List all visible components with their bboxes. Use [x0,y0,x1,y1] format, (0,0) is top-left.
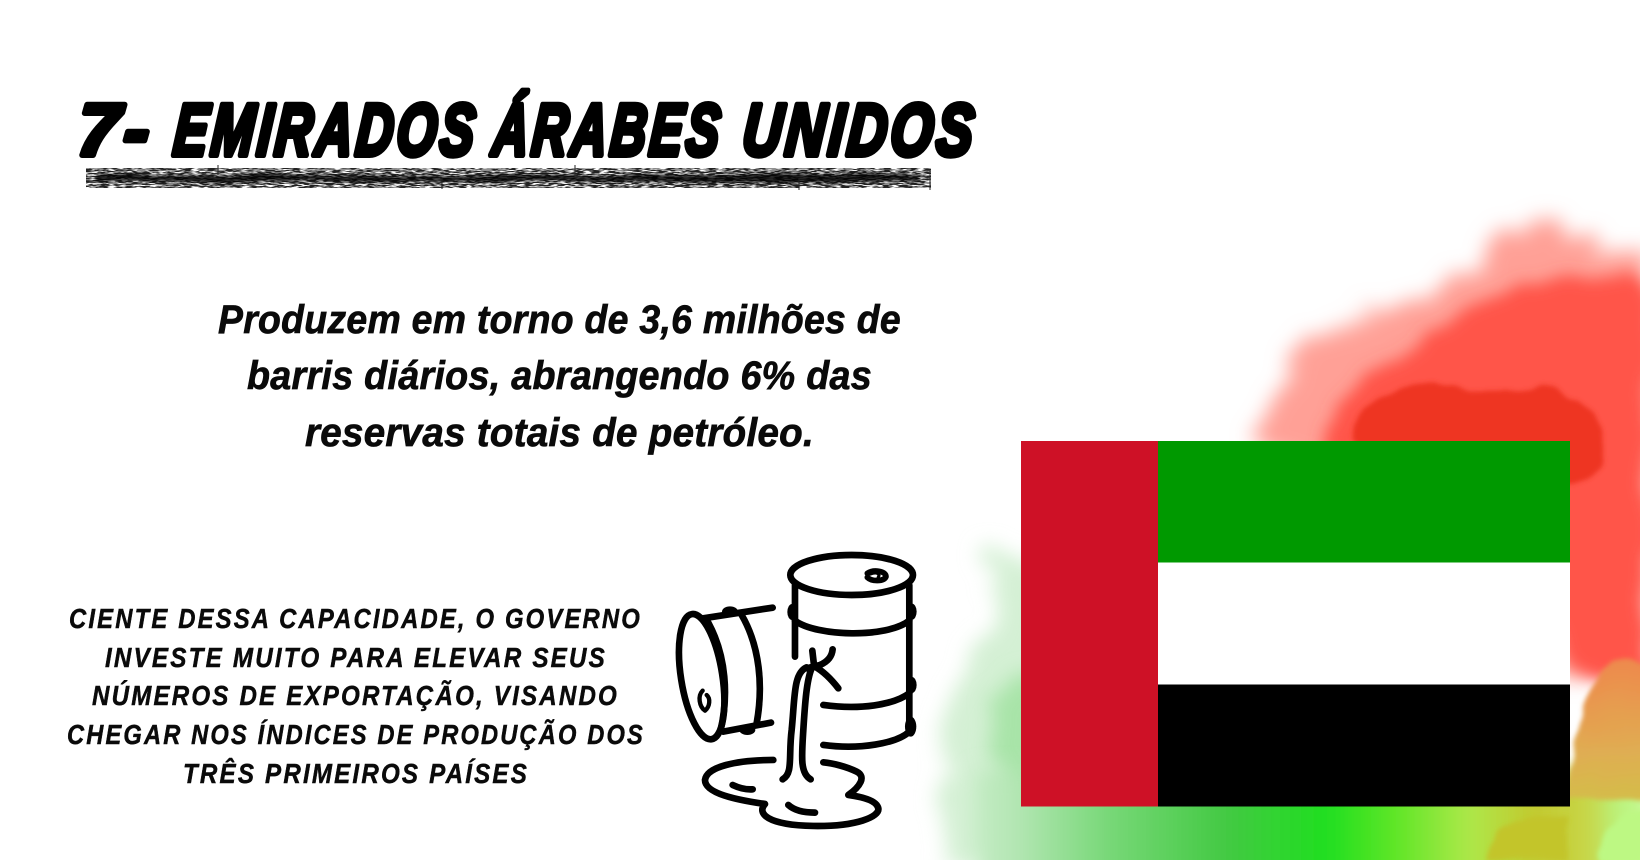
title: UNIDOS [740,90,981,171]
flag: United Arab Emirates [1021,441,1570,806]
title underline brush stroke [86,165,931,190]
text block: government investment: NÚMEROS DE EXPORTAÇÃO, VISANDO [92,680,619,711]
text block: government investment: CHEGAR NOS ÍNDICES DE PRODUÇÃO DOS [67,719,645,750]
text block: government investment: TRÊS PRIMEIROS PAÍSES [183,758,529,789]
title: 7- [75,90,158,171]
text block: production figures [218,298,901,455]
title: ÁRABES [488,90,727,171]
title [75,90,981,171]
text block: production figures: reservas totais de petróleo. [305,411,814,455]
text block: government investment: INVESTE MUITO PARA ELEVAR SEUS [105,642,607,673]
text block: government investment [67,603,645,789]
watercolor splash background [944,222,1640,860]
text block: production figures: barris diários, abrangendo 6% das [247,354,872,398]
icon: oil barrels with spill [671,555,917,826]
text block: production figures: Produzem em torno de 3,6 milhões de [218,298,901,342]
text block: government investment: CIENTE DESSA CAPACIDADE, O GOVERNO [69,603,642,634]
title: EMIRADOS [171,90,482,171]
